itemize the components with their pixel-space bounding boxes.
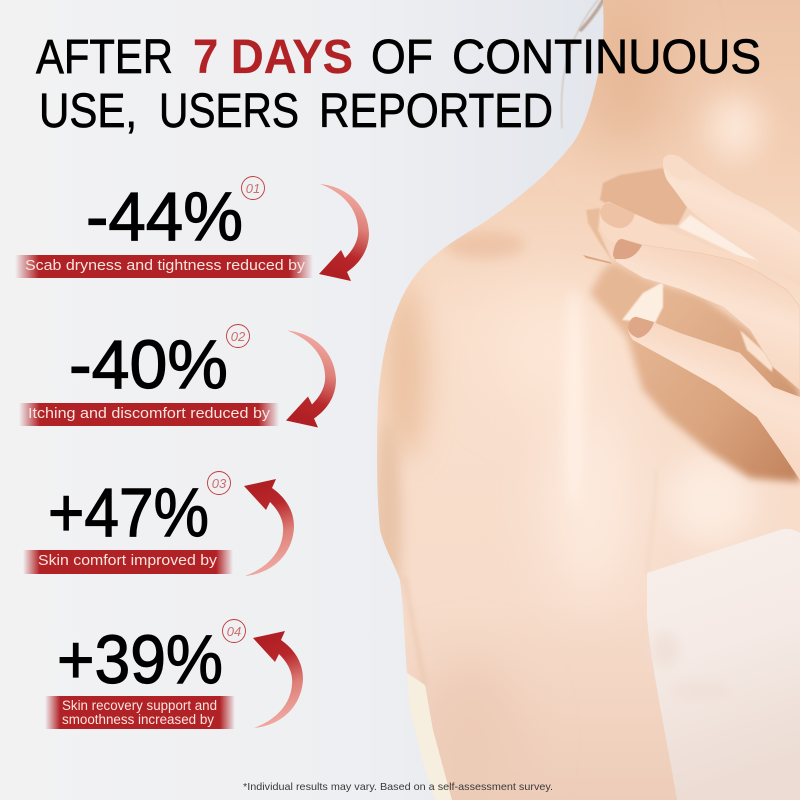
stat 4: +39% [45,620,303,729]
title: OF [371,31,433,84]
stat 2: -40% [19,324,336,428]
title: USERS [159,85,299,138]
caption 4: Skin recovery support and [62,698,217,713]
value 4: +39% [57,621,223,698]
badge 01 [242,176,264,200]
title: USE, [39,85,137,138]
nail 2 [600,202,635,228]
nail 1 [663,155,697,180]
bra strap strip [407,673,452,800]
arrow up 4 [253,631,303,728]
caption bar 4 [45,696,235,729]
caption 1: Scab dryness and tightness reduced by [25,258,306,274]
garment folds [651,632,730,698]
nail 3 [613,239,642,259]
badge 02 [226,324,250,348]
white garment [647,529,800,800]
finger 1 [663,155,800,287]
value 3: +47% [48,474,209,551]
arrow up 3 [244,479,294,576]
skin: neck, shoulder, arm and chest [370,0,800,800]
finger 2 [600,202,757,268]
hair wisps [561,0,603,128]
caption bar 1 [15,255,313,278]
footnote: *Individual results may vary. Based on a self-assessment survey. [243,781,553,793]
caption 2: Itching and discomfort reduced by [28,406,271,422]
title: CONTINUOUS [452,31,761,84]
badge 04: 04 [227,624,241,639]
caption bar 2 [19,403,279,426]
badge 02: 02 [231,329,246,344]
badge 03 [208,472,230,494]
title: 7 DAYS [193,31,353,84]
badge 03: 03 [212,476,227,491]
badge 04 [222,620,246,642]
arrow down 2 [286,330,336,428]
nail 4 [628,317,654,338]
arm creases [404,578,425,682]
caption 4: smoothness increased by [62,712,214,727]
badge 01: 01 [246,181,260,196]
hand shadows [600,168,687,225]
stat 3: +47% [23,472,294,576]
title: REPORTED [319,85,553,138]
stat 1: -44% [15,176,369,281]
caption 4 [62,698,217,727]
title: AFTER [36,31,173,84]
value 1: -44% [86,178,243,255]
caption 3: Skin comfort improved by [38,553,218,569]
photo: woman's shoulder and hand [370,0,800,800]
finger 4 [628,317,800,480]
value 2: -40% [69,326,228,403]
title [36,31,761,138]
caption bar 3 [23,550,233,574]
finger 3 [613,239,800,390]
arrow down 1 [319,184,369,281]
